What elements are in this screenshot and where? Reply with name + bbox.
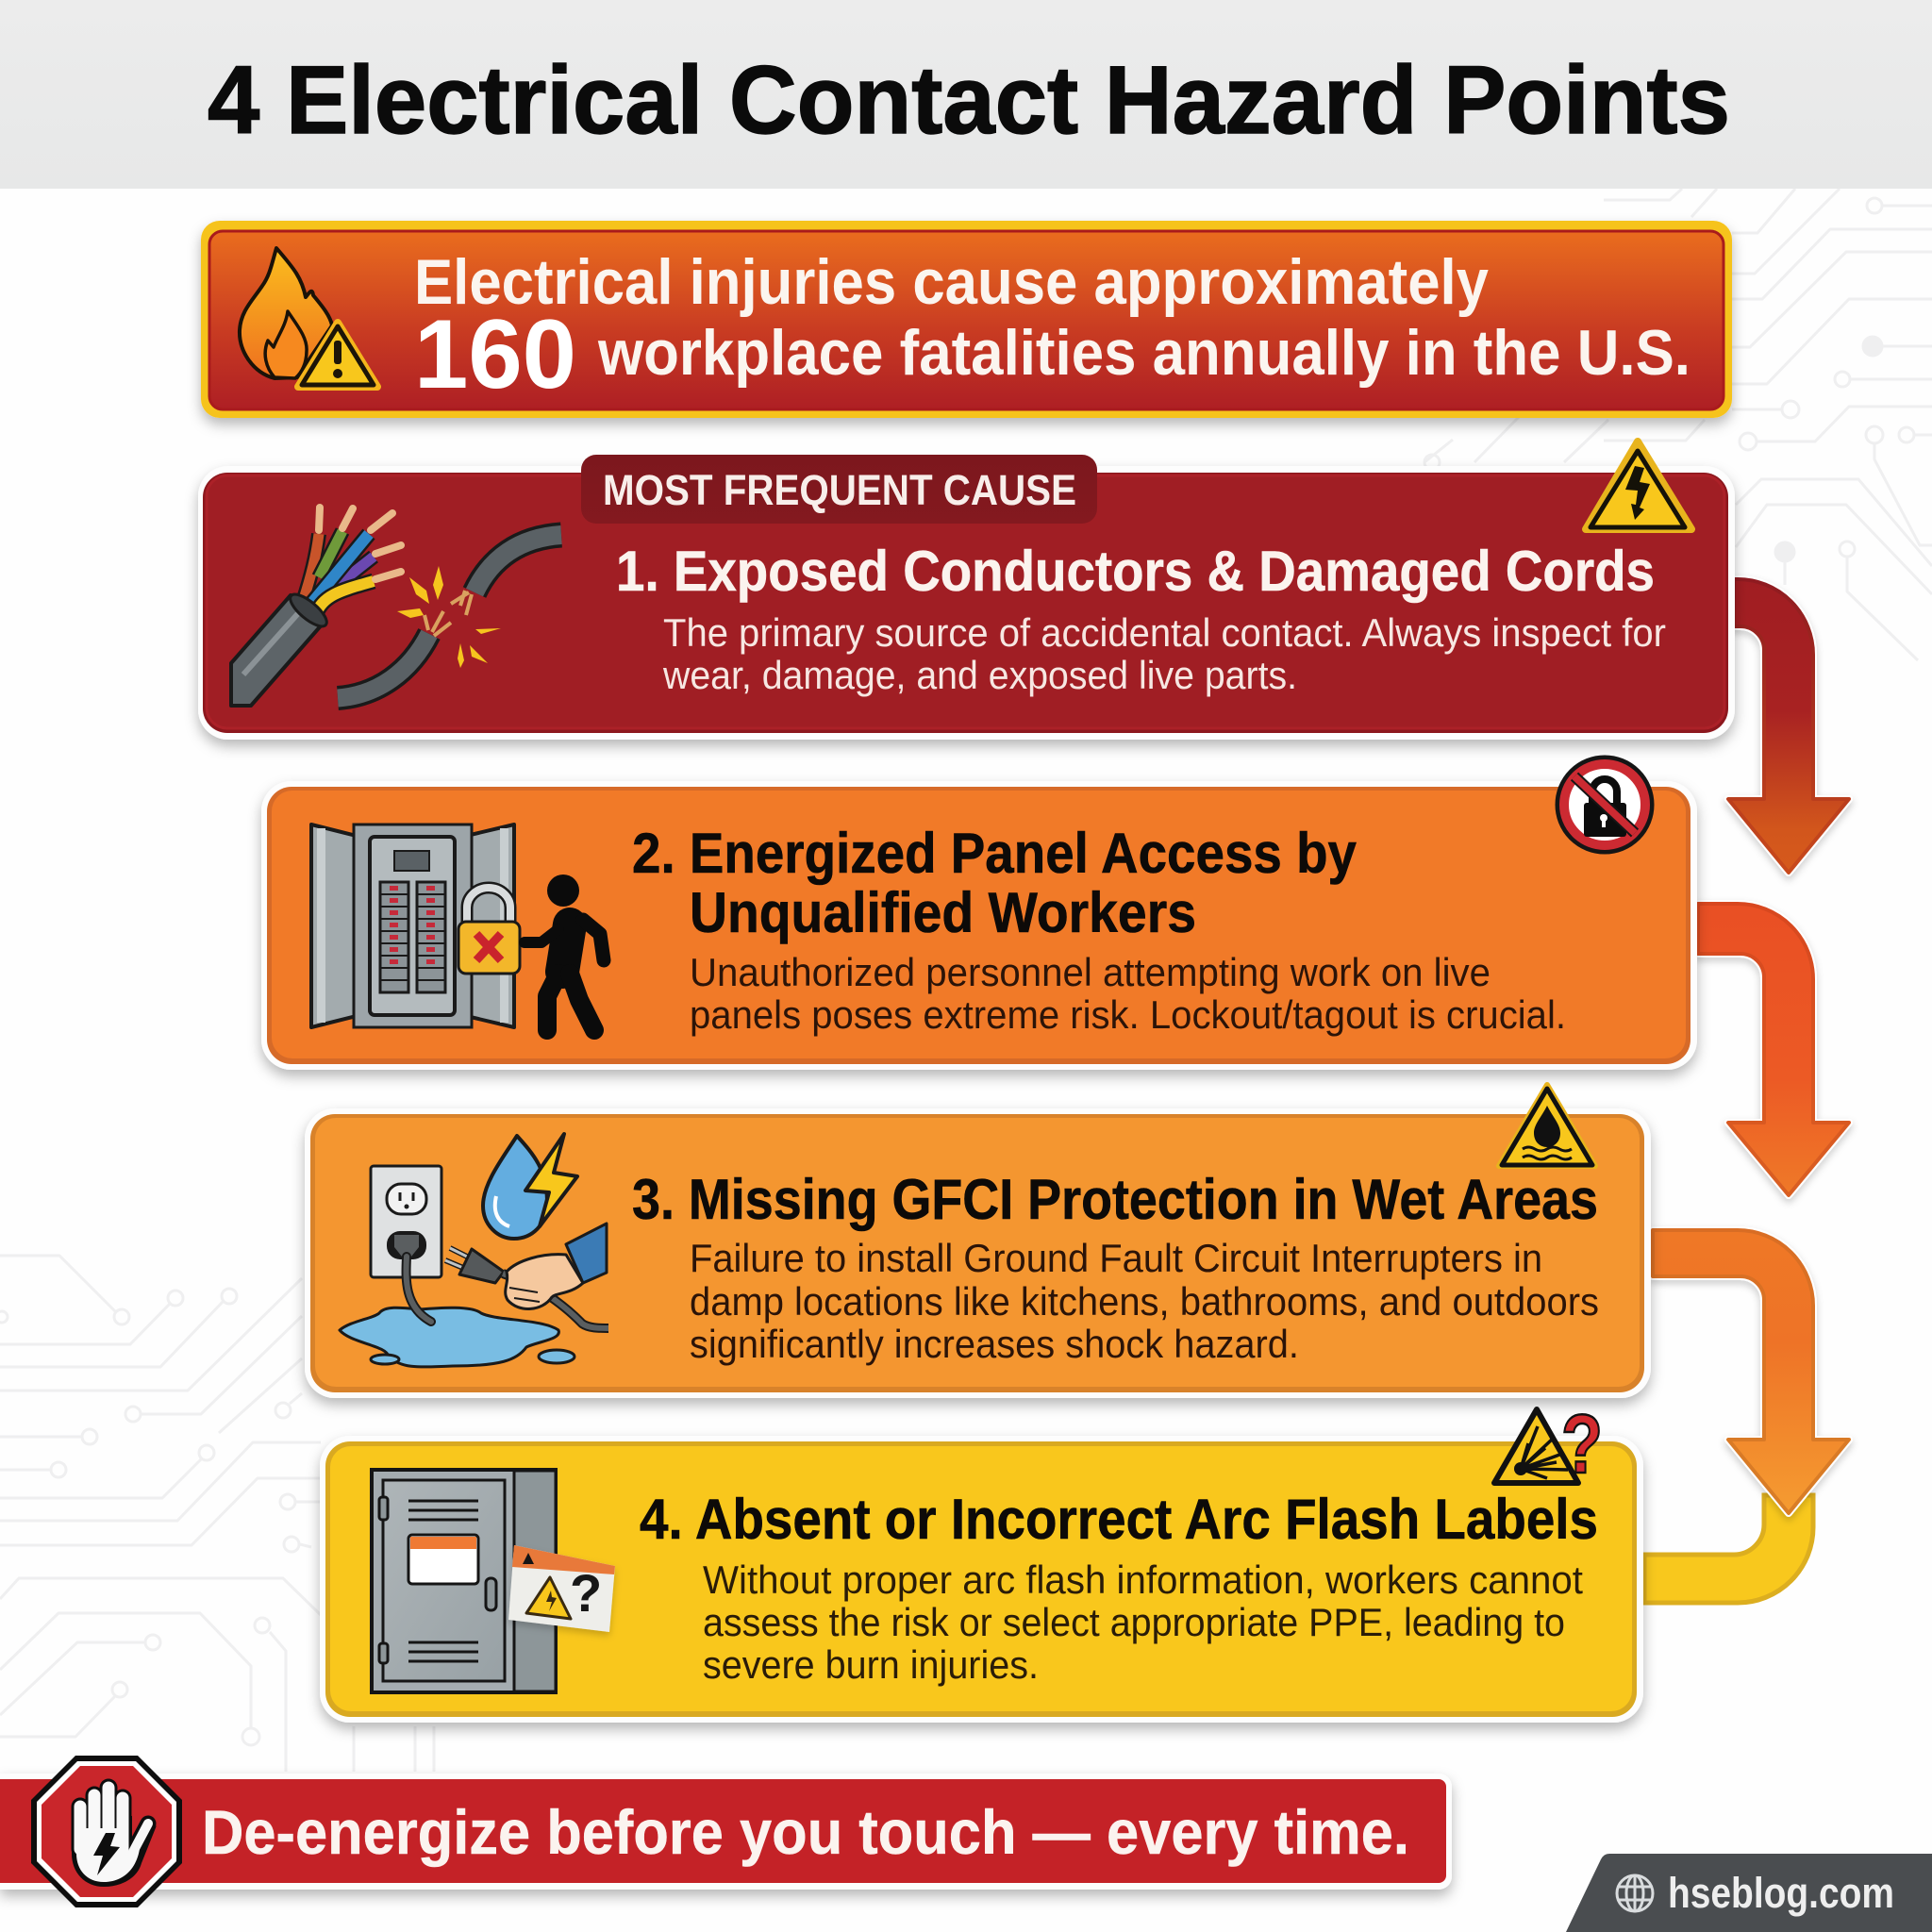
icon: flame with warning triangle <box>240 248 377 387</box>
icon: outlet, water and plug <box>340 1134 608 1367</box>
icon: arc flash triangle with question mark: ? <box>1561 1397 1603 1491</box>
icon: locked electrical panel <box>311 824 520 1027</box>
heading: hazard 3: 3. Missing GFCI Protection in Wet Areas <box>632 1168 1598 1231</box>
panel: hazard 1 <box>198 441 1735 740</box>
text: hazard 3 description: significantly increases shock hazard. <box>690 1322 1299 1366</box>
panel: hazard 3 <box>305 1085 1651 1398</box>
text: number 160: 160 <box>414 300 576 409</box>
heading: hazard 4: 4. Absent or Incorrect Arc Flash Labels <box>640 1488 1598 1551</box>
text: statistic line 1: Electrical injuries cause approximately <box>414 246 1489 318</box>
text: de-energize slogan: De-energize before you touch — every time. <box>202 1797 1409 1867</box>
text: hazard 3 description: Failure to install Ground Fault Circuit Interrupters in <box>690 1236 1542 1280</box>
panel: hazard 2 <box>261 758 1697 1070</box>
text: hazard 1 description: The primary source of accidental contact. Always inspect for <box>663 610 1666 655</box>
icon: worker silhouette <box>525 874 604 1030</box>
text: hazard 3 description <box>690 1236 1599 1366</box>
heading: hazard 1: 1. Exposed Conductors & Damaged Cords <box>616 540 1655 603</box>
icon: electrical cabinet with worn label: ? <box>570 1563 602 1623</box>
text: hazard 4 description: severe burn injuries. <box>703 1642 1039 1687</box>
icon: exposed cable <box>231 508 561 706</box>
text: statistic line 2: workplace fatalities annually in the U.S. <box>597 317 1690 389</box>
icon: arc flash triangle with question mark <box>1494 1397 1603 1491</box>
badge: most frequent cause: MOST FREQUENT CAUSE <box>603 466 1076 514</box>
watermark: hseblog.com: hseblog.com <box>1668 1869 1894 1917</box>
text: hazard 2 description <box>690 950 1566 1037</box>
icon: electrical cabinet with worn label <box>372 1470 615 1692</box>
text: hazard 1 description <box>662 610 1666 697</box>
arrow: card 3 to card 4 <box>1653 1230 1849 1513</box>
heading: hazard 2 <box>632 822 1357 944</box>
icon: globe <box>1617 1875 1653 1911</box>
arrow: card 2 to card 3 <box>1698 904 1849 1195</box>
header band <box>0 0 1932 189</box>
icon: stop sign with hand <box>31 1756 182 1907</box>
callout: de-energize footer bar <box>0 1756 1452 1907</box>
badge: most frequent cause <box>581 455 1097 524</box>
text: hazard 4 description <box>703 1557 1583 1687</box>
text: hazard 4 description: Without proper arc flash information, workers cannot <box>703 1557 1583 1602</box>
text: hazard 1 description: wear, damage, and exposed live parts. <box>662 653 1297 697</box>
arrow: card 1 to card 2 <box>1728 579 1849 873</box>
text: hazard 4 description: assess the risk or select appropriate PPE, leading to <box>703 1600 1565 1644</box>
watermark: hseblog.com <box>1566 1854 1932 1932</box>
panel: statistic banner <box>201 221 1732 418</box>
heading: hazard 2: Unqualified Workers <box>690 881 1196 944</box>
text: hazard 3 description: damp locations like kitchens, bathrooms, and outdoors <box>690 1279 1599 1324</box>
text: hazard 2 description: panels poses extreme risk. Lockout/tagout is crucial. <box>690 992 1566 1037</box>
heading: hazard 2: 2. Energized Panel Access by <box>632 822 1357 885</box>
icon: wet area triangle <box>1499 1085 1595 1166</box>
panel: hazard 4 <box>320 1397 1643 1723</box>
icon: no lock sign <box>1557 758 1652 852</box>
icon: high voltage triangle <box>1586 441 1691 529</box>
arrow: card 4 yellow connector <box>1644 1495 1813 1603</box>
text: hazard 2 description: Unauthorized personnel attempting work on live <box>690 950 1491 994</box>
title: 4 Electrical Contact Hazard Points <box>208 46 1730 154</box>
